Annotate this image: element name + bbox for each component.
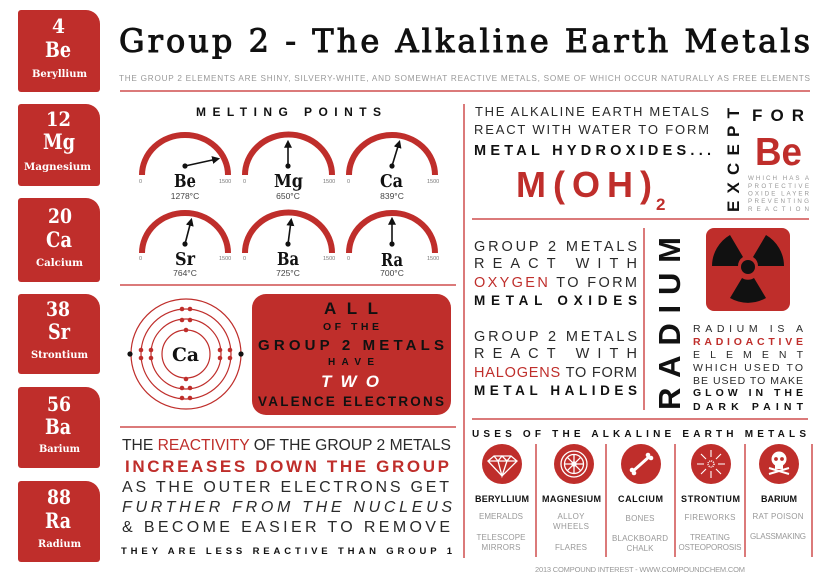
gauge: magnesium: 1500 — [323, 179, 335, 185]
tile: magnesium — [18, 104, 100, 186]
element tiles column — [18, 10, 100, 562]
use: barium: GLASSMAKING — [750, 532, 806, 541]
use: beryllium: BERYLLIUM — [475, 494, 529, 504]
tile: magnesium: 12 — [46, 107, 71, 131]
use: beryllium — [475, 444, 529, 552]
gauge: strontium — [139, 213, 231, 278]
use: calcium: BONES — [626, 514, 654, 523]
gauge: calcium — [347, 135, 439, 201]
tile: radium: Radium — [38, 538, 81, 550]
text block: water reaction: METAL HYDROXIDES... — [474, 143, 711, 159]
gauge: calcium: 1500 — [427, 179, 439, 185]
callout: two valence electrons: TWO — [321, 372, 379, 391]
gauge: beryllium: 1500 — [219, 179, 231, 185]
gauge: strontium: 764°C — [173, 268, 197, 278]
panel: melting points — [139, 105, 439, 278]
text block: oxygen and halogens: METAL OXIDES — [474, 293, 637, 308]
gauge: beryllium: Be — [174, 172, 196, 192]
tile: beryllium: 4 — [52, 14, 65, 38]
tile: barium: 56 — [47, 392, 71, 416]
text block: oxygen and halogens: REACT WITH — [474, 346, 637, 362]
text block: reactivity: & BECOME EASIER TO REMOVE — [122, 519, 450, 536]
tile: strontium: 38 — [46, 297, 70, 321]
text block: radium facts: DARK PAINT — [693, 401, 804, 413]
use: beryllium: TELESCOPE — [476, 533, 526, 542]
callout: two valence electrons: OF THE — [323, 321, 379, 333]
tile: beryllium: Beryllium — [32, 68, 87, 80]
gauge: calcium: 839°C — [380, 191, 404, 201]
use: strontium: OSTEOPOROSIS — [678, 543, 742, 552]
text block: radium facts: GLOW IN THE — [693, 387, 803, 399]
callout: two valence electrons: GROUP 2 METALS — [258, 337, 444, 354]
tile: radium — [18, 481, 100, 562]
text block: except for Be: OXIDE LAYER — [748, 190, 810, 198]
use: strontium: TREATING — [690, 533, 730, 542]
text block: except for Be: WHICH HAS A — [748, 175, 810, 182]
tile: barium — [18, 387, 100, 468]
text block: oxygen and halogens: HALOGENS TO FORM — [474, 365, 637, 381]
diagram: calcium electron shells — [127, 299, 244, 409]
gauge: barium: 1500 — [323, 256, 335, 262]
icon: radiation hazard — [706, 228, 790, 311]
text block: radium facts: BE USED TO MAKE — [693, 375, 803, 387]
gauge: calcium: Ca — [380, 172, 403, 192]
text block: except for Be: FOR — [752, 106, 804, 125]
use: calcium: CHALK — [626, 544, 654, 553]
text block: radium facts: WHICH USED TO — [693, 362, 803, 374]
text block: oxygen and halogens: OXYGEN TO FORM — [474, 275, 637, 291]
gauge: beryllium: 1278°C — [171, 191, 199, 201]
tile: strontium — [18, 294, 100, 374]
text block: oxygen and halogens: GROUP 2 METALS — [474, 239, 637, 255]
use: calcium: BLACKBOARD — [612, 534, 668, 543]
text block: water reaction — [474, 104, 711, 214]
text block: oxygen and halogens — [474, 239, 637, 398]
text block: except for Be: PROTECTIVE — [748, 183, 809, 190]
use: magnesium: FLARES — [555, 543, 587, 552]
heading: uses: USES OF THE ALKALINE EARTH METALS — [472, 429, 806, 440]
tile: barium: Barium — [39, 443, 80, 455]
text block: except for Be — [724, 106, 810, 213]
use: magnesium: MAGNESIUM — [542, 494, 601, 504]
gauge: radium — [347, 213, 439, 278]
gauge: beryllium: 0 — [139, 179, 142, 185]
gauge: radium: Ra — [381, 251, 403, 271]
gauge: strontium: 1500 — [219, 256, 231, 262]
tile: magnesium: Mg — [43, 129, 75, 154]
tile: barium: Ba — [45, 414, 71, 439]
formula: metal hydroxide: 2 — [656, 195, 665, 214]
text block: reactivity — [121, 437, 453, 557]
heading: melting points: MELTING POINTS — [196, 105, 381, 119]
formula: metal hydroxide: M(OH) — [516, 164, 652, 205]
text block: radium facts: RADIUM IS A — [693, 323, 803, 335]
text block: oxygen and halogens: REACT WITH — [474, 256, 637, 272]
text block: reactivity: THE REACTIVITY OF THE GROUP 2 METALS — [122, 437, 451, 454]
text block: reactivity: AS THE OUTER ELECTRONS GET — [122, 479, 449, 496]
callout: two valence electrons: HAVE — [328, 357, 374, 368]
use: magnesium: ALLOY — [558, 512, 585, 521]
use: magnesium: WHEELS — [553, 522, 589, 531]
gauge: magnesium: 650°C — [276, 191, 300, 201]
use: barium: RAT POISON — [752, 512, 804, 521]
tile: radium: Ra — [45, 508, 71, 533]
subtitle: THE GROUP 2 ELEMENTS ARE SHINY, SILVERY-WHITE, AND SOMEWHAT REACTIVE METALS, SOME OF WHICH OCCUR NATURALLY AS FREE ELEMENTS — [119, 74, 811, 83]
use: beryllium: EMERALDS — [479, 512, 523, 521]
text block: except for Be: Be — [755, 131, 802, 174]
text block: except for Be: PREVENTING — [748, 198, 809, 205]
gauge: calcium: 0 — [347, 179, 350, 185]
diagram: calcium electron shells: Ca — [172, 344, 199, 366]
use: calcium — [612, 444, 668, 553]
tile: strontium: Sr — [48, 319, 71, 344]
text block: reactivity: INCREASES DOWN THE GROUP — [125, 457, 449, 476]
text block: reactivity: FURTHER FROM THE NUCLEUS — [122, 499, 452, 516]
gauge: strontium: 0 — [139, 256, 142, 262]
tile: calcium — [18, 198, 100, 282]
panel: uses of the alkaline earth metals — [472, 429, 806, 553]
gauge: barium: 725°C — [276, 268, 300, 278]
text block: radium facts — [693, 323, 804, 413]
use: strontium: FIREWORKS — [684, 513, 736, 522]
gauge: beryllium — [139, 135, 231, 201]
text block: radium facts: RADIOACTIVE — [693, 336, 803, 348]
callout: two valence electrons: ALL — [324, 299, 378, 318]
use: calcium: CALCIUM — [618, 494, 663, 504]
gauge: magnesium: 0 — [243, 179, 246, 185]
use: barium — [750, 444, 806, 541]
use: beryllium: MIRRORS — [482, 543, 520, 552]
tile: strontium: Strontium — [31, 349, 88, 361]
gauge: barium — [243, 213, 335, 278]
gauge: strontium: Sr — [175, 250, 196, 270]
text block: oxygen and halogens: GROUP 2 METALS — [474, 329, 637, 345]
title: Group 2 - The Alkaline Earth Metals — [119, 22, 810, 60]
text block: except for Be: REACTION — [748, 206, 809, 213]
tile: beryllium: Be — [45, 37, 71, 62]
text block: oxygen and halogens: METAL HALIDES — [474, 383, 637, 398]
text block: except for Be: EXCEPT — [724, 107, 743, 212]
callout: two valence electrons: VALENCE ELECTRONS — [258, 394, 444, 409]
text block: radium facts: ELEMENT — [693, 349, 804, 361]
tile: radium: 88 — [47, 485, 71, 509]
gauge: magnesium — [243, 135, 335, 201]
tile: beryllium — [18, 10, 100, 92]
text block: water reaction: REACT WITH WATER TO FORM — [474, 122, 709, 137]
callout: two valence electrons — [252, 294, 451, 415]
gauge: radium: 0 — [347, 256, 350, 262]
gauge: barium: Ba — [277, 250, 299, 270]
use: magnesium — [542, 444, 601, 552]
gauge: barium: 0 — [243, 256, 246, 262]
gauge: radium: 1500 — [427, 256, 439, 262]
text block: reactivity: THEY ARE LESS REACTIVE THAN GROUP 1 — [121, 546, 453, 557]
gauge: radium: 700°C — [380, 268, 404, 278]
use: strontium — [678, 444, 742, 552]
gauge: magnesium: Mg — [274, 172, 303, 192]
vertical heading: radium: RADIUM — [652, 237, 687, 410]
tile: magnesium: Magnesium — [24, 161, 91, 173]
tile: calcium: Calcium — [36, 257, 83, 269]
footer credit: 2013 COMPOUND INTEREST - WWW.COMPOUNDCHEM.COM — [535, 565, 745, 574]
use: barium: BARIUM — [761, 494, 797, 504]
text block: water reaction: THE ALKALINE EARTH METALS — [475, 104, 709, 119]
tile: calcium: Ca — [46, 227, 72, 252]
tile: calcium: 20 — [48, 204, 72, 228]
use: strontium: STRONTIUM — [681, 494, 740, 504]
